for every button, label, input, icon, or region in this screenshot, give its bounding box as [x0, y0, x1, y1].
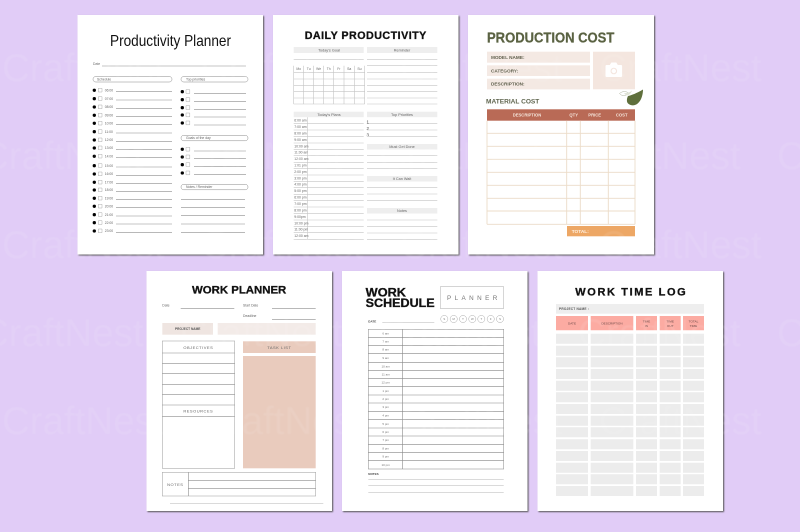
title: work schedule: WORK [366, 288, 407, 300]
icon: leaves [620, 90, 643, 105]
weekday circles: W [471, 317, 474, 321]
table header: TIME [667, 319, 674, 323]
table header [556, 316, 704, 330]
today's plans: 2:00 pm [294, 170, 307, 174]
weekly grid: Tu [307, 67, 311, 71]
title: daily productivity: DAILY PRODUCTIVITY [305, 30, 426, 42]
table header: TIME [643, 319, 650, 323]
notes and reminder: Notes / Reminder [186, 185, 213, 189]
weekday circles: S [443, 317, 445, 321]
schedule table: 9 am [382, 356, 390, 360]
today's plans: 5:00 pm [294, 189, 307, 193]
project name bar: PROJECT NAME : [559, 307, 589, 311]
watermark: CraftNest [2, 400, 165, 443]
watermark: CraftNest [578, 135, 741, 178]
schedule table: 5 pm [382, 422, 390, 426]
watermark [0, 47, 800, 443]
today's plans: 3:00 pm [294, 177, 307, 181]
table rows [556, 334, 704, 496]
schedule table: 2 pm [382, 397, 390, 401]
date field: Date [93, 62, 100, 66]
title: work time log: WORK TIME LOG [575, 286, 686, 298]
today's plans: Today's Plans [317, 113, 341, 117]
top priorities: Top Priorities [391, 113, 413, 117]
weekday circles: F [490, 317, 492, 321]
top priorities: 3 [366, 132, 370, 138]
photo placeholder with camera icon [593, 52, 635, 89]
table header: DESCRIPTION [601, 321, 623, 325]
watermark: CraftNest [599, 47, 762, 90]
schedule table: 3 pm [382, 405, 390, 409]
schedule rows: 08:00 [105, 105, 113, 109]
it can wait [367, 176, 437, 200]
schedule rows: 14:00 [105, 154, 113, 158]
category field: CATEGORY: [491, 68, 519, 73]
watermark: CraftNest [599, 224, 762, 267]
today's plans: 4:00 pm [294, 183, 307, 187]
watermark: CraftNest [400, 224, 563, 267]
today's plans: 8:00 pm [294, 208, 307, 212]
notes [367, 208, 437, 239]
schedule rows: 06:00 [105, 88, 113, 92]
watermark: CraftNest [201, 224, 364, 267]
today's goal: Today's Goal [318, 48, 340, 52]
watermark: CraftNest [599, 400, 762, 443]
schedule rows: 19:00 [105, 196, 113, 200]
today's plans: 7:00 pm [294, 202, 307, 206]
top priorities [366, 112, 437, 138]
weekly grid: Sa [347, 67, 351, 71]
panel: work time log [538, 271, 723, 511]
watermark: CraftNest [201, 400, 364, 443]
weekly grid: We [316, 67, 321, 71]
schedule table: 4 pm [382, 414, 390, 418]
weekly grid: Fr [337, 67, 341, 71]
schedule rows: 23:00 [105, 229, 113, 233]
it can wait: It Can Wait [393, 177, 412, 181]
date fields: Deadline [243, 314, 256, 318]
weekday circles: T [480, 317, 482, 321]
schedule rows: 15:00 [105, 164, 113, 168]
title: production cost: PRODUCTION COST [487, 30, 614, 46]
schedule table: 11 am [382, 372, 390, 376]
weekday circles: M [453, 317, 456, 321]
watermark: CraftNest [2, 224, 165, 267]
panel: work planner [146, 271, 332, 511]
date field [368, 319, 434, 323]
project name: PROJECT NAME [175, 327, 200, 331]
notes [162, 472, 316, 496]
table header: OUT [667, 324, 674, 328]
watermark: CraftNest [400, 400, 563, 443]
planner label box: PLANNER [447, 295, 498, 302]
today's plans: 10:00 pm [294, 222, 309, 226]
schedule table: 6 pm [382, 430, 390, 434]
schedule rows: 10:00 [105, 122, 113, 126]
notes: NOTES [167, 482, 183, 487]
model name field: MODEL NAME: [491, 55, 525, 60]
panel: daily productivity [273, 15, 458, 254]
today's plans: 12:00 am [294, 234, 309, 238]
title: productivity planner: Productivity Planner [110, 33, 232, 50]
today's goal [294, 47, 364, 59]
project name bar [556, 304, 704, 314]
today's plans: 11:00 pm [294, 228, 308, 232]
objectives and resources: RESOURCES [183, 408, 213, 413]
notes lines [368, 472, 504, 492]
schedule table: 1 pm [382, 389, 390, 393]
top priorities [181, 76, 248, 125]
schedule rows: 18:00 [105, 188, 113, 192]
task list [243, 341, 316, 468]
schedule rows: 11:00 [105, 130, 113, 134]
today's plans: 12:00 am [294, 157, 309, 161]
panel: production cost [468, 15, 654, 254]
schedule table: 6 am [382, 332, 390, 336]
today's plans: 1:01 pm [294, 164, 307, 168]
material cost table: COST [616, 113, 628, 118]
material cost table: PRICE [588, 113, 601, 118]
goals of the day [181, 135, 248, 175]
table header: DATE [568, 321, 576, 325]
material cost table: QTY [569, 113, 578, 118]
schedule table [368, 329, 504, 469]
weekly grid: Mo [296, 67, 301, 71]
today's plans [294, 112, 364, 239]
material cost table: DESCRIPTION [513, 113, 541, 118]
today's plans: 9:00 am [294, 138, 307, 142]
today's plans: 6:00 pm [294, 196, 307, 200]
top priorities: Top priorities [186, 77, 206, 81]
top priorities: 2 [366, 126, 370, 131]
today's plans: 6:00 am [294, 118, 307, 122]
project name [162, 323, 316, 335]
table header: TIME [690, 324, 697, 328]
schedule rows: 09:00 [105, 114, 113, 118]
schedule table: 12 pm [382, 380, 390, 384]
watermark: CraftNest [180, 135, 343, 178]
weekly grid: Th [327, 67, 331, 71]
material cost table [487, 109, 635, 224]
reminder [367, 47, 437, 104]
schedule rows: 12:00 [105, 138, 113, 142]
task list: TASK LIST [267, 345, 291, 350]
model name field [487, 52, 590, 63]
reminder: Reminder [394, 48, 411, 52]
objectives and resources [162, 341, 235, 468]
weekly grid: Su [357, 67, 362, 71]
schedule rows: 17:00 [105, 180, 113, 184]
today's plans: 11:00 am [294, 151, 308, 155]
notes and reminder [181, 184, 248, 233]
date fields: Start Date [243, 304, 258, 308]
goals of the day: Goals of the day [186, 136, 211, 140]
total row: TOTAL: [572, 229, 589, 235]
date fields: Date [162, 304, 170, 308]
schedule table: 7 am [382, 340, 390, 344]
weekly grid [294, 66, 365, 104]
schedule rows: 22:00 [105, 221, 113, 225]
schedule heading: Schedule [97, 77, 111, 81]
date field: DATE [368, 319, 376, 323]
schedule table: 7 pm [382, 438, 390, 442]
watermark: CraftNest [379, 312, 542, 355]
must get done [367, 144, 437, 169]
table header: IN [645, 324, 648, 328]
notes lines: NOTES [368, 472, 379, 476]
schedule rows: 21:00 [105, 213, 113, 217]
category field [487, 65, 590, 76]
notes: Notes [397, 209, 407, 213]
total row [567, 226, 635, 236]
watermark: CraftNest [379, 135, 542, 178]
schedule rows: 07:00 [105, 97, 113, 101]
watermark: CraftNest [180, 312, 343, 355]
schedule heading [93, 76, 172, 82]
watermark: CraftNest [201, 47, 364, 90]
description field [487, 79, 590, 89]
today's plans: 8:00 am [294, 132, 307, 136]
weekday circles: S [499, 317, 501, 321]
watermark: CraftNest [400, 47, 563, 90]
top priorities: 1 [366, 120, 370, 124]
schedule table: 10 am [382, 364, 390, 368]
schedule rows: 16:00 [105, 172, 113, 176]
today's plans: 9:00pm [294, 215, 306, 219]
description field: DESCRIPTION: [491, 82, 525, 87]
title: work schedule [366, 288, 435, 310]
schedule rows: 13:00 [105, 146, 113, 150]
schedule table: 9 pm [382, 454, 390, 458]
schedule table: 10 pm [382, 463, 390, 467]
today's plans: 7:00 am [294, 125, 307, 129]
panel: productivity planner [78, 15, 263, 254]
weekday circles [441, 315, 504, 323]
material cost heading: MATERIAL COST [486, 98, 539, 105]
schedule rows: 20:00 [105, 204, 113, 208]
schedule rows [94, 88, 172, 233]
title: work schedule: SCHEDULE [366, 298, 435, 310]
weekday circles: T [462, 317, 464, 321]
watermark: CraftNest [2, 47, 165, 90]
date fields [162, 304, 316, 320]
must get done: Must Get Done [389, 145, 415, 149]
table header: TOTAL [689, 319, 699, 323]
today's plans: 10:00 am [294, 144, 309, 148]
planner label box [440, 286, 504, 309]
title: work planner: WORK PLANNER [192, 285, 286, 297]
panel: work schedule [342, 271, 528, 511]
objectives and resources: OBJECTIVES [183, 345, 213, 350]
schedule table: 8 pm [382, 446, 390, 450]
schedule table: 8 am [382, 348, 390, 352]
watermark: CraftNest [578, 312, 741, 355]
